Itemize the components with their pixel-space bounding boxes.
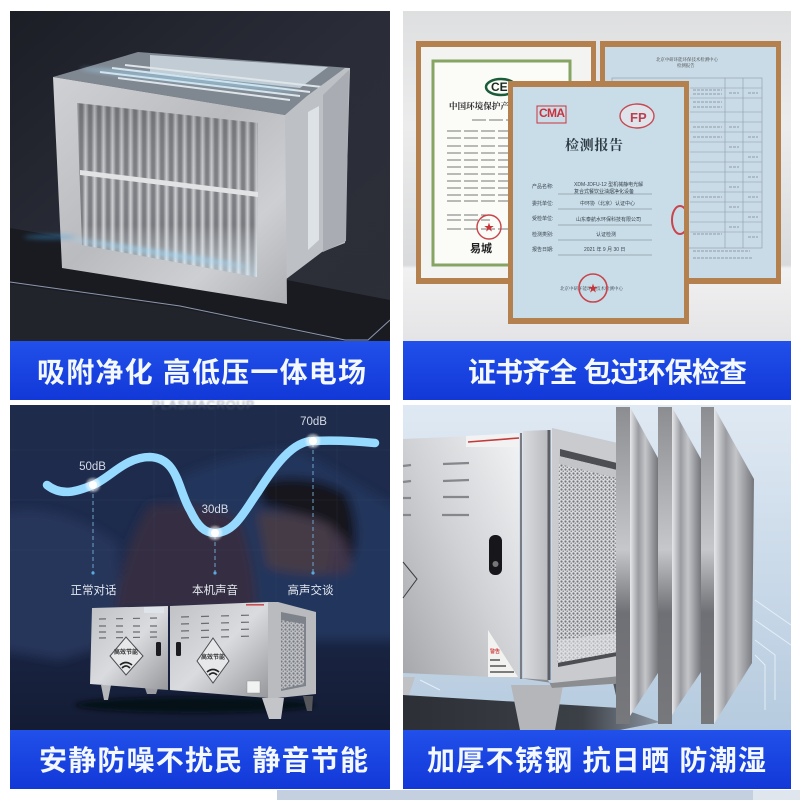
dashed drop lines — [93, 443, 313, 573]
small spec sticker — [247, 681, 260, 693]
50dB point — [86, 478, 100, 575]
partial diamond label — [403, 562, 417, 598]
certificate frame right — [600, 41, 781, 284]
side mesh filter — [281, 612, 306, 691]
report fields: 产品名称: — [532, 183, 553, 190]
dark platform — [10, 228, 390, 341]
module side panel — [285, 68, 350, 280]
report fields — [532, 181, 643, 253]
banner: stainless steel: 加厚不锈钢 抗日晒 防潮湿 — [427, 745, 766, 776]
fin shading — [77, 103, 258, 277]
module top opening — [53, 52, 350, 115]
face — [257, 513, 336, 574]
door handle — [489, 535, 502, 575]
cabinet bottom band — [519, 674, 640, 688]
red seal left: ★ — [484, 223, 494, 234]
cross bar — [80, 170, 258, 197]
label 50dB: 50dB — [79, 461, 106, 473]
banner: quiet operation: 安静防噪不扰民 静音节能 — [39, 745, 368, 776]
report title: 检测报告 — [565, 137, 623, 154]
70dB point — [306, 434, 320, 575]
side glow streak — [24, 235, 76, 239]
dark studio background — [10, 11, 390, 341]
side frame — [268, 602, 316, 698]
right door vents — [181, 615, 256, 638]
steel plate 3 — [701, 407, 754, 724]
caption loud conversation: 高声交谈 — [288, 583, 334, 597]
blue glow on top — [80, 66, 300, 94]
report fields: 认证检测 — [596, 231, 616, 238]
pale blue background — [403, 405, 791, 730]
green certificate border — [433, 61, 570, 265]
report fields: 检测类别: — [532, 231, 553, 238]
left door handle — [156, 642, 161, 656]
30dB point — [208, 526, 222, 575]
faint grid — [10, 405, 390, 600]
noise curve — [47, 441, 375, 533]
panel: quiet operation — [0, 398, 400, 730]
product: purifier cabinet — [90, 602, 316, 719]
warning triangle sticker: 警告 — [490, 648, 500, 655]
right door handle — [176, 642, 181, 656]
side glass strip — [308, 106, 319, 250]
door seam — [520, 433, 522, 679]
red seal front — [579, 274, 607, 302]
cabinet corner strip — [523, 430, 548, 680]
results table — [612, 78, 762, 248]
electrode rods — [100, 65, 322, 100]
product: electrode module — [53, 52, 350, 304]
table text hints — [693, 90, 758, 258]
left pillow — [10, 512, 120, 662]
night bedroom background — [10, 405, 390, 730]
right warning diamond: 高效节能 — [201, 653, 225, 661]
certificate frame front: test report — [508, 81, 689, 324]
right warning diamond — [197, 638, 229, 683]
red pressure label — [466, 433, 519, 447]
module rear wall — [150, 55, 328, 88]
caption machine sound: 本机声音 — [192, 583, 238, 597]
banner: adsorption — [10, 341, 390, 400]
side flange — [323, 70, 349, 252]
cabinet side frame — [552, 428, 640, 688]
report fields: 复合式餐饮业油烟净化设备 — [574, 188, 634, 195]
red seal left — [477, 215, 501, 239]
banner: adsorption: 吸附净化 高低压一体电场 — [37, 357, 366, 388]
side seal — [672, 206, 688, 234]
report subheading: 检测报告 — [677, 62, 695, 69]
report fields: 2021 年 9 月 30 日 — [584, 246, 625, 253]
accreditation stamp: FP — [630, 110, 647, 125]
red seal front: ★ — [588, 284, 598, 295]
certificate title: 中国环境保护产 — [449, 101, 509, 111]
fin opening — [77, 103, 258, 277]
left warning diamond: 高效节能 — [114, 648, 138, 656]
accreditation stamp — [620, 104, 654, 128]
shoulder — [115, 504, 257, 610]
filter mesh — [557, 449, 617, 667]
field underlines — [558, 194, 652, 255]
back and front feet — [101, 685, 111, 700]
report fields: 受检单位: — [532, 215, 553, 222]
label 70dB: 70dB — [300, 416, 327, 428]
report fields: 报告日期: — [532, 246, 553, 253]
sleeping woman illustration — [0, 450, 400, 660]
floor shadow — [403, 695, 660, 730]
platform highlight edge — [10, 282, 390, 340]
strip dark edge — [548, 430, 550, 680]
steel plate 2 — [658, 407, 701, 724]
banner: quiet operation — [10, 730, 390, 789]
platform lower face — [10, 284, 345, 341]
issuer line: 北京中研环能环保技术检测中心 — [560, 285, 624, 292]
banner: certificates — [403, 341, 791, 400]
cabinet front door — [403, 434, 519, 678]
warning triangle sticker — [488, 630, 518, 677]
report heading: 北京中研环能环保技术检测中心 — [656, 56, 719, 63]
module front frame — [53, 77, 287, 304]
base glow — [71, 236, 249, 270]
certificate body lines — [447, 120, 510, 229]
report fields: 委托单位: — [532, 200, 553, 207]
noise curve chart — [47, 416, 375, 597]
report fields: 山东泰航水环保科技有限公司 — [576, 216, 641, 223]
brand logo sticker — [144, 607, 164, 613]
banner: certificates: 证书齐全 包过环保检查 — [468, 357, 747, 388]
left warning diamond — [110, 637, 143, 675]
light wall background — [403, 11, 791, 341]
banner: stainless steel — [403, 730, 791, 789]
report fields: XDM-JDFU-12 型机械静电光解 — [574, 181, 643, 188]
circuit lines background — [420, 600, 791, 710]
steel plate 1 — [616, 407, 658, 724]
cabinet left door — [90, 606, 168, 690]
floor shadow — [75, 697, 315, 713]
cabinet feet — [403, 677, 620, 730]
report fields: 中环协（北京）认证中心 — [580, 200, 635, 207]
panel: electrostatic field module — [10, 11, 390, 341]
caption normal conversation: 正常对话 — [70, 583, 117, 597]
CMA stamp: CMA — [539, 106, 565, 120]
left door vents — [99, 618, 158, 638]
hand — [328, 530, 350, 575]
cabinet right door — [170, 602, 268, 698]
certificate frame left — [416, 41, 596, 284]
label 30dB: 30dB — [202, 504, 229, 516]
cover seal overflow — [684, 200, 689, 240]
hair — [258, 478, 356, 560]
red top label — [246, 604, 264, 606]
background pillow — [180, 450, 400, 640]
panel: certificates — [403, 11, 791, 341]
door vents — [403, 463, 469, 515]
blurred faint watermark: PLASMACROUP — [152, 398, 255, 412]
CEC logo: CEC — [491, 80, 517, 94]
signature: 易城 — [470, 241, 492, 255]
panel: thickened stainless steel — [403, 405, 791, 730]
bottom light strip — [277, 790, 800, 800]
